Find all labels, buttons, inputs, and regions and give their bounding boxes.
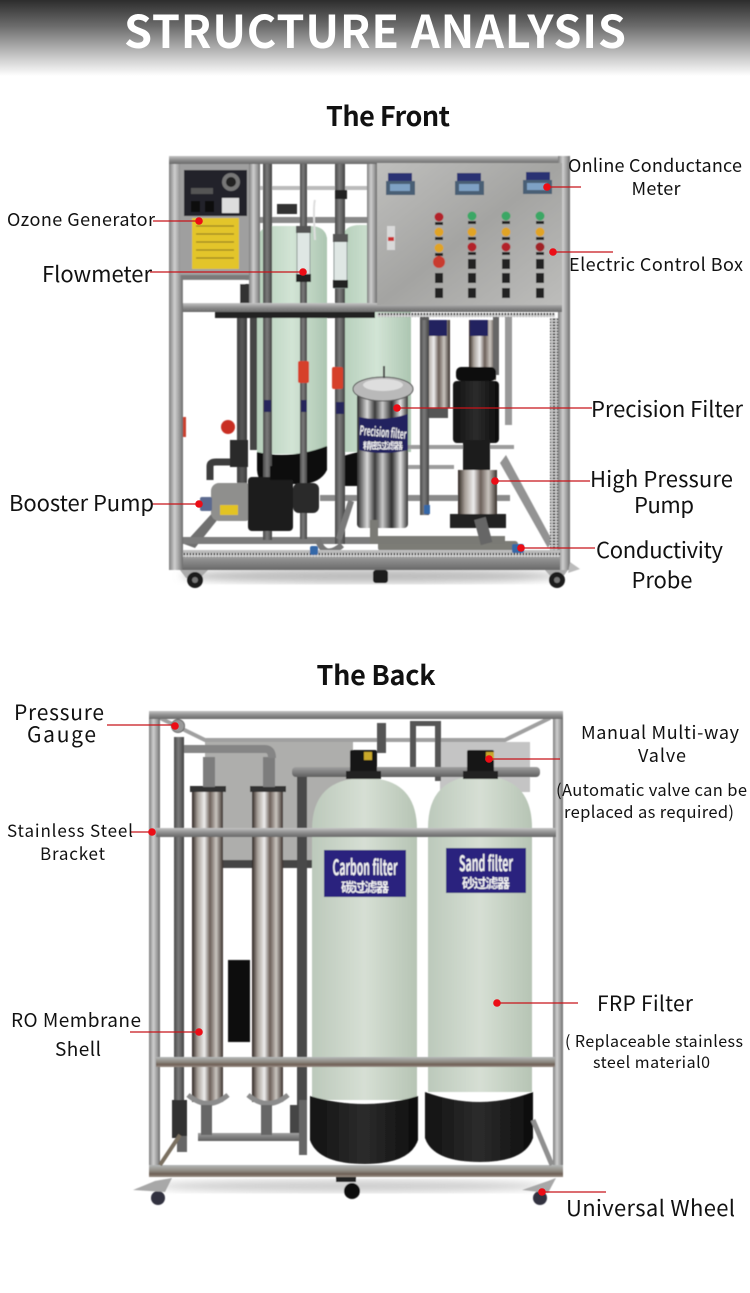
callout: pressure gauge: Pressure — [14, 697, 104, 727]
pressure gauge — [172, 720, 184, 732]
callout: FRP filter: ( Replaceable stainless — [565, 1028, 743, 1052]
red valves — [183, 361, 343, 437]
callout: manual multi-way valve: (Automatic valve can be — [556, 777, 747, 801]
flowmeters — [296, 190, 348, 288]
column 4 buttons — [536, 212, 544, 298]
column 1 buttons — [433, 212, 445, 298]
pipes — [210, 164, 429, 551]
sand filter tank: 砂过滤器 — [462, 873, 510, 892]
callout: high pressure pump — [491, 462, 733, 520]
frame uprights and bars — [169, 156, 570, 570]
column 2 buttons — [468, 212, 476, 298]
heading: the front: The Front — [326, 95, 450, 134]
callout: precision filter — [393, 392, 743, 424]
precision filter housing: 精密过滤器 — [363, 439, 403, 452]
carbon filter tank — [310, 778, 418, 1164]
callout: online conductance meter — [543, 152, 742, 201]
callout: stainless steel bracket: Bracket — [40, 840, 106, 865]
callout: pressure gauge: Gauge — [27, 719, 96, 749]
casters — [180, 562, 580, 588]
callout: manual multi-way valve: replaced as required) — [564, 799, 734, 823]
precision filter housing — [353, 366, 505, 540]
callout: conductivity probe: Probe — [632, 563, 692, 595]
callout: RO membrane shell: Shell — [55, 1035, 101, 1062]
control panel — [184, 170, 247, 216]
column 3 buttons — [502, 212, 510, 298]
stainless steel frame — [149, 711, 563, 1177]
sand filter tank — [425, 776, 533, 1162]
callout: flowmeter — [42, 257, 307, 289]
casters — [133, 1177, 556, 1205]
callout: manual multi-way valve: Manual Multi-way — [581, 719, 740, 745]
callout: FRP filter — [493, 988, 743, 1073]
callout: FRP filter: steel material0 — [593, 1049, 710, 1073]
carbon filter tank: Carbon filter — [332, 852, 398, 882]
callout: pressure gauge — [14, 697, 179, 749]
warning label — [192, 218, 239, 269]
callout: FRP filter: FRP Filter — [597, 988, 694, 1018]
electric control box — [377, 163, 562, 305]
callout: stainless steel bracket: Stainless Steel — [7, 817, 133, 842]
callout: booster pump: Booster Pump — [9, 486, 154, 518]
callout: RO membrane shell — [11, 1006, 203, 1062]
floor frame rails — [183, 445, 552, 551]
callout: manual multi-way valve — [485, 719, 747, 823]
heading: the back: The Back — [316, 654, 436, 693]
callout: conductivity probe — [517, 533, 724, 595]
callout: RO membrane shell: RO Membrane — [11, 1006, 141, 1033]
callout: conductivity probe: Conductivity — [596, 533, 724, 565]
callout: high pressure pump: High Pressure — [590, 462, 733, 494]
callout: high pressure pump: Pump — [634, 488, 694, 520]
photo: back of the RO system — [133, 711, 563, 1205]
photo: front of the RO system — [169, 156, 580, 588]
conductivity probes — [310, 505, 524, 555]
precision filter housing: Precision filter — [359, 420, 408, 443]
carbon filter tank: 碳过滤器 — [341, 877, 389, 896]
header band — [0, 0, 750, 76]
piping — [172, 737, 307, 1155]
ozone generator box — [180, 164, 249, 303]
RO membrane shells — [180, 749, 288, 1104]
callout: manual multi-way valve: Valve — [638, 742, 686, 768]
conductance meters — [388, 173, 412, 181]
callout: flowmeter: Flowmeter — [42, 257, 152, 289]
sand filter tank: Sand filter — [459, 848, 513, 878]
back plate — [160, 718, 550, 1120]
callout: universal wheel: Universal Wheel — [566, 1191, 735, 1223]
booster pump — [200, 466, 319, 531]
tanks behind the frame — [257, 186, 411, 486]
high pressure pump — [450, 367, 506, 545]
callout: precision filter: Precision Filter — [591, 392, 743, 424]
callout: stainless steel bracket — [7, 817, 156, 865]
rear membranes — [420, 315, 512, 515]
callout: online conductance meter: Meter — [632, 175, 682, 201]
callout: electric control box: Electric Control Box — [569, 251, 743, 277]
callout: ozone generator: Ozone Generator — [7, 206, 156, 232]
manifold pipe and valve heads — [292, 750, 540, 779]
callout: online conductance meter: Online Conductance — [568, 152, 742, 178]
